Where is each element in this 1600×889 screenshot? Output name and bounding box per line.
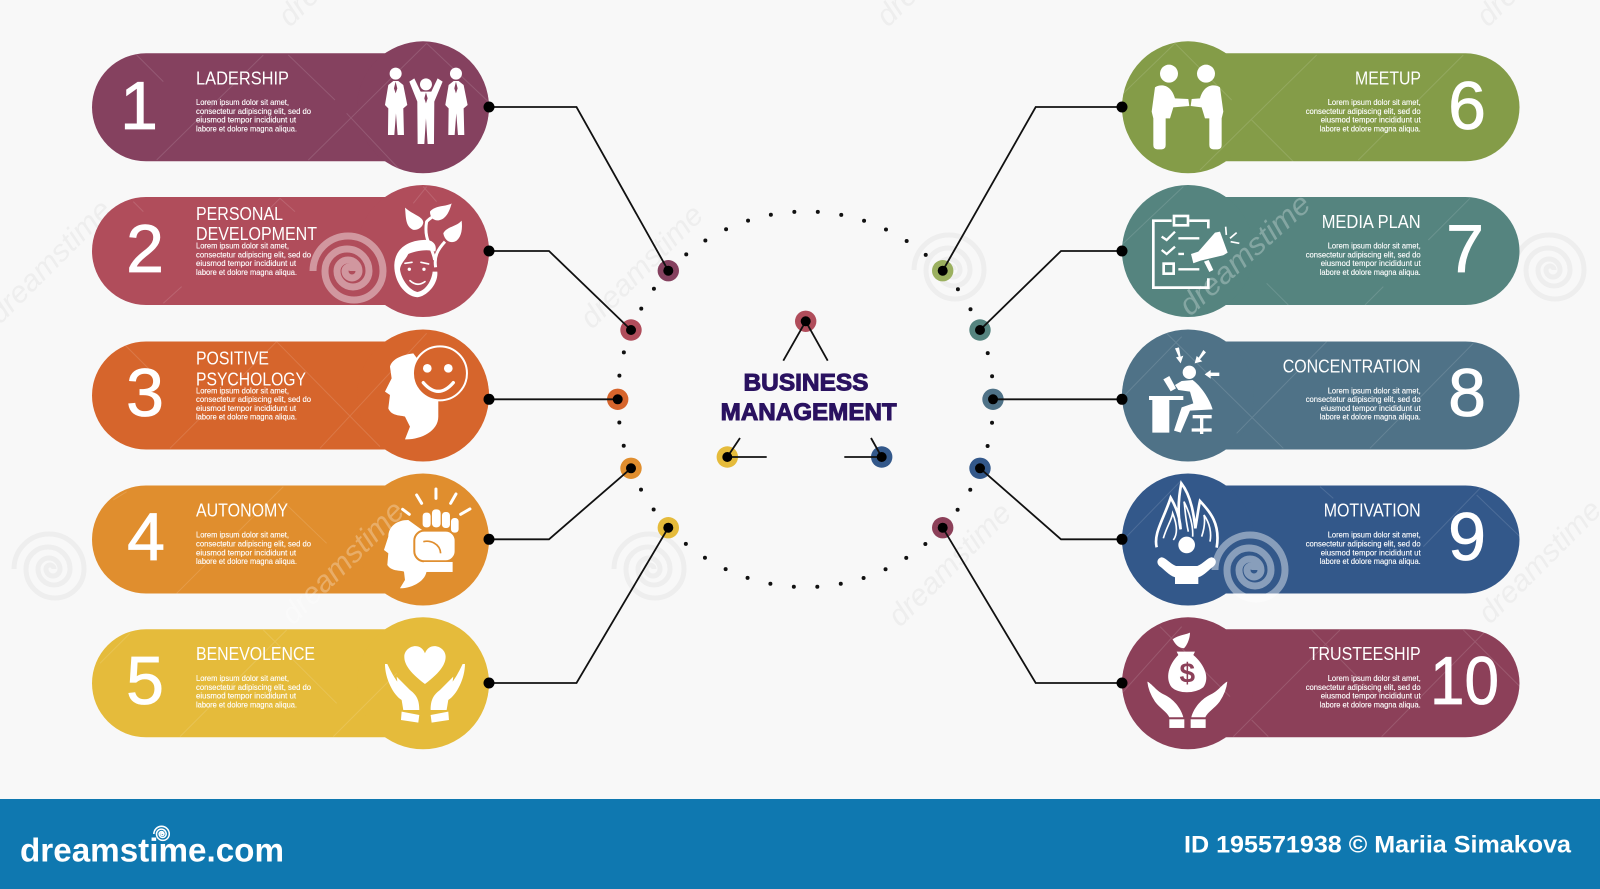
text block: lorem 3 <box>196 386 312 422</box>
connector 3 <box>484 389 628 410</box>
text block: lorem 5: consectetur adipiscing elit, sed do <box>196 683 312 692</box>
text block: lorem 4: eiusmod tempor incididunt ut <box>196 548 297 557</box>
text block: lorem 9: eiusmod tempor incididunt ut <box>1321 548 1421 557</box>
icon: hands holding money bag <box>1147 633 1227 728</box>
icon: head with smiley <box>385 346 467 439</box>
icon: person concentrating at desk <box>1149 347 1219 434</box>
text block: lorem 10: labore et dolore magna aliqua. <box>1320 700 1421 709</box>
icon: meditating person with flames <box>1156 483 1218 584</box>
panel: 4 Autonomy <box>92 474 489 631</box>
heading: Meetup: MEETUP <box>1355 68 1421 88</box>
text: dreamstime <box>882 496 1018 633</box>
footer bar <box>0 799 1600 889</box>
number 6: 6 <box>1448 68 1486 144</box>
heading: Positive psychology: PSYCHOLOGY <box>196 369 306 389</box>
central triangle node: top <box>783 311 828 361</box>
text block: lorem 10: eiusmod tempor incididunt ut <box>1321 692 1421 701</box>
panel: 1 Ladership <box>92 41 489 173</box>
text block: lorem 3: eiusmod tempor incididunt ut <box>196 404 297 413</box>
text block: lorem 6: consectetur adipiscing elit, sed do <box>1306 107 1421 116</box>
number 5: 5 <box>126 643 164 719</box>
central title <box>721 370 897 426</box>
heading: Motivation: MOTIVATION <box>1324 501 1421 521</box>
icon: head with growing plant <box>394 203 462 297</box>
watermark text: dreamstime <box>1173 187 1317 322</box>
text block: lorem 2: labore et dolore magna aliqua. <box>196 268 297 277</box>
central triangle node: right <box>844 438 892 468</box>
number 7: 7 <box>1446 211 1484 287</box>
connector 7 <box>969 246 1128 341</box>
text block: lorem 5: Lorem ipsum dolor sit amet, <box>196 674 289 683</box>
number 10: 10 <box>1430 643 1499 719</box>
text block: lorem 2: eiusmod tempor incididunt ut <box>196 259 297 268</box>
text block: lorem 2 <box>196 242 312 277</box>
text block: lorem 10: Lorem ipsum dolor sit amet, <box>1328 674 1421 683</box>
panel: 3 Positive psychology <box>92 330 489 462</box>
number 9: 9 <box>1448 499 1486 575</box>
heading: Trusteeship: TRUSTEESHIP <box>1309 644 1421 664</box>
text block: lorem 9: Lorem ipsum dolor sit amet, <box>1328 531 1421 540</box>
connector 1 <box>484 102 679 281</box>
text block: lorem 6: labore et dolore magna aliqua. <box>1320 124 1421 133</box>
text block: lorem 4: Lorem ipsum dolor sit amet, <box>196 531 289 540</box>
connector 9 <box>969 458 1128 545</box>
number 8: 8 <box>1448 355 1486 431</box>
icon: checklist with megaphone <box>1153 216 1239 288</box>
icon: handshake <box>1152 65 1223 149</box>
text block: lorem 8 <box>1306 386 1421 422</box>
heading: Media plan: MEDIA PLAN <box>1322 212 1421 232</box>
panel: 10 Trusteeship <box>1122 617 1520 749</box>
icon: three business people <box>385 68 468 144</box>
text block: lorem 8: eiusmod tempor incididunt ut <box>1321 404 1421 413</box>
panel: 9 Motivation <box>1122 474 1520 606</box>
footer logo: dreamstime.com <box>20 832 284 869</box>
text block: lorem 8: consectetur adipiscing elit, sed do <box>1306 395 1421 404</box>
text block: lorem 10: consectetur adipiscing elit, sed do <box>1306 683 1421 692</box>
panel: 7 Media plan <box>1122 185 1520 322</box>
text block: lorem 4 <box>196 531 312 566</box>
connector 2 <box>484 246 642 341</box>
text block: lorem 1 <box>196 98 312 133</box>
heading: Autonomy: AUTONOMY <box>196 501 288 521</box>
text block: lorem 6: Lorem ipsum dolor sit amet, <box>1328 98 1421 107</box>
text block: lorem 3: Lorem ipsum dolor sit amet, <box>196 386 289 395</box>
central title: BUSINESS <box>744 370 868 397</box>
text block: lorem 9: labore et dolore magna aliqua. <box>1320 557 1421 566</box>
icon: head with raised fist <box>384 489 470 588</box>
text block: lorem 3: labore et dolore magna aliqua. <box>196 413 297 422</box>
text block: lorem 3: consectetur adipiscing elit, sed do <box>196 395 312 404</box>
text block: lorem 8: labore et dolore magna aliqua. <box>1320 413 1421 422</box>
heading: Positive psychology <box>196 349 306 389</box>
text block: lorem 2: consectetur adipiscing elit, sed do <box>196 250 312 259</box>
panel: 6 Meetup <box>1122 41 1520 173</box>
text block: lorem 7: labore et dolore magna aliqua. <box>1320 268 1421 277</box>
heading: Benevolence: BENEVOLENCE <box>196 644 315 664</box>
watermark spiral <box>313 236 383 300</box>
watermark spiral <box>1215 535 1285 599</box>
panel: 2 Personal development <box>92 185 489 317</box>
text block: lorem 9 <box>1306 531 1421 566</box>
text block: lorem 1: labore et dolore magna aliqua. <box>196 124 297 133</box>
panel: 5 Benevolence <box>92 617 489 749</box>
number 3: 3 <box>126 355 164 431</box>
text block: lorem 10 <box>1306 674 1421 709</box>
central title: MANAGEMENT <box>721 399 897 426</box>
connector 6 <box>932 102 1128 281</box>
text block: lorem 1: eiusmod tempor incididunt ut <box>196 116 297 125</box>
text block: lorem 1: Lorem ipsum dolor sit amet, <box>196 98 289 107</box>
text block: lorem 7: consectetur adipiscing elit, sed do <box>1306 250 1421 259</box>
text block: lorem 1: consectetur adipiscing elit, sed do <box>196 107 312 116</box>
central triangle node: left <box>717 438 767 468</box>
watermark text: dreamstime <box>275 494 411 631</box>
text block: lorem 9: consectetur adipiscing elit, sed do <box>1306 540 1421 548</box>
icon: hands holding heart <box>385 646 465 723</box>
text block: lorem 7: eiusmod tempor incididunt ut <box>1321 259 1421 268</box>
text block: lorem 7 <box>1306 242 1421 277</box>
connector 10 <box>932 517 1128 688</box>
footer credit: ID 195571938 © Mariia Simakova <box>1184 831 1572 858</box>
heading: Concentration: CONCENTRATION <box>1283 356 1421 376</box>
heading: Ladership: LADERSHIP <box>196 68 289 88</box>
connector 4 <box>484 458 642 545</box>
text block: lorem 4: labore et dolore magna aliqua. <box>196 557 297 566</box>
text block: lorem 4: consectetur adipiscing elit, sed do <box>196 540 312 548</box>
heading: Personal development <box>196 204 317 244</box>
connector 8 <box>982 389 1128 410</box>
dotted ring <box>618 211 994 587</box>
number 4: 4 <box>127 499 165 575</box>
text block: lorem 5: labore et dolore magna aliqua. <box>196 700 297 709</box>
text block: lorem 5: eiusmod tempor incididunt ut <box>196 692 297 701</box>
icon: hands holding money bag: $ <box>1180 657 1196 688</box>
number 2: 2 <box>126 211 164 287</box>
panel: 8 Concentration <box>1122 330 1520 462</box>
connector 5 <box>484 517 679 688</box>
text block: lorem 8: Lorem ipsum dolor sit amet, <box>1328 386 1421 395</box>
text block: lorem 6: eiusmod tempor incididunt ut <box>1321 116 1421 125</box>
text block: lorem 2: Lorem ipsum dolor sit amet, <box>196 242 289 250</box>
text block: lorem 6 <box>1306 98 1421 133</box>
heading: Positive psychology: POSITIVE <box>196 349 269 369</box>
heading: Personal development: DEVELOPMENT <box>196 224 317 244</box>
text block: lorem 7: Lorem ipsum dolor sit amet, <box>1328 242 1421 250</box>
text block: lorem 5 <box>196 674 312 709</box>
text: dreamstime <box>574 198 710 335</box>
number 1: 1 <box>120 68 158 144</box>
heading: Personal development: PERSONAL <box>196 204 283 224</box>
